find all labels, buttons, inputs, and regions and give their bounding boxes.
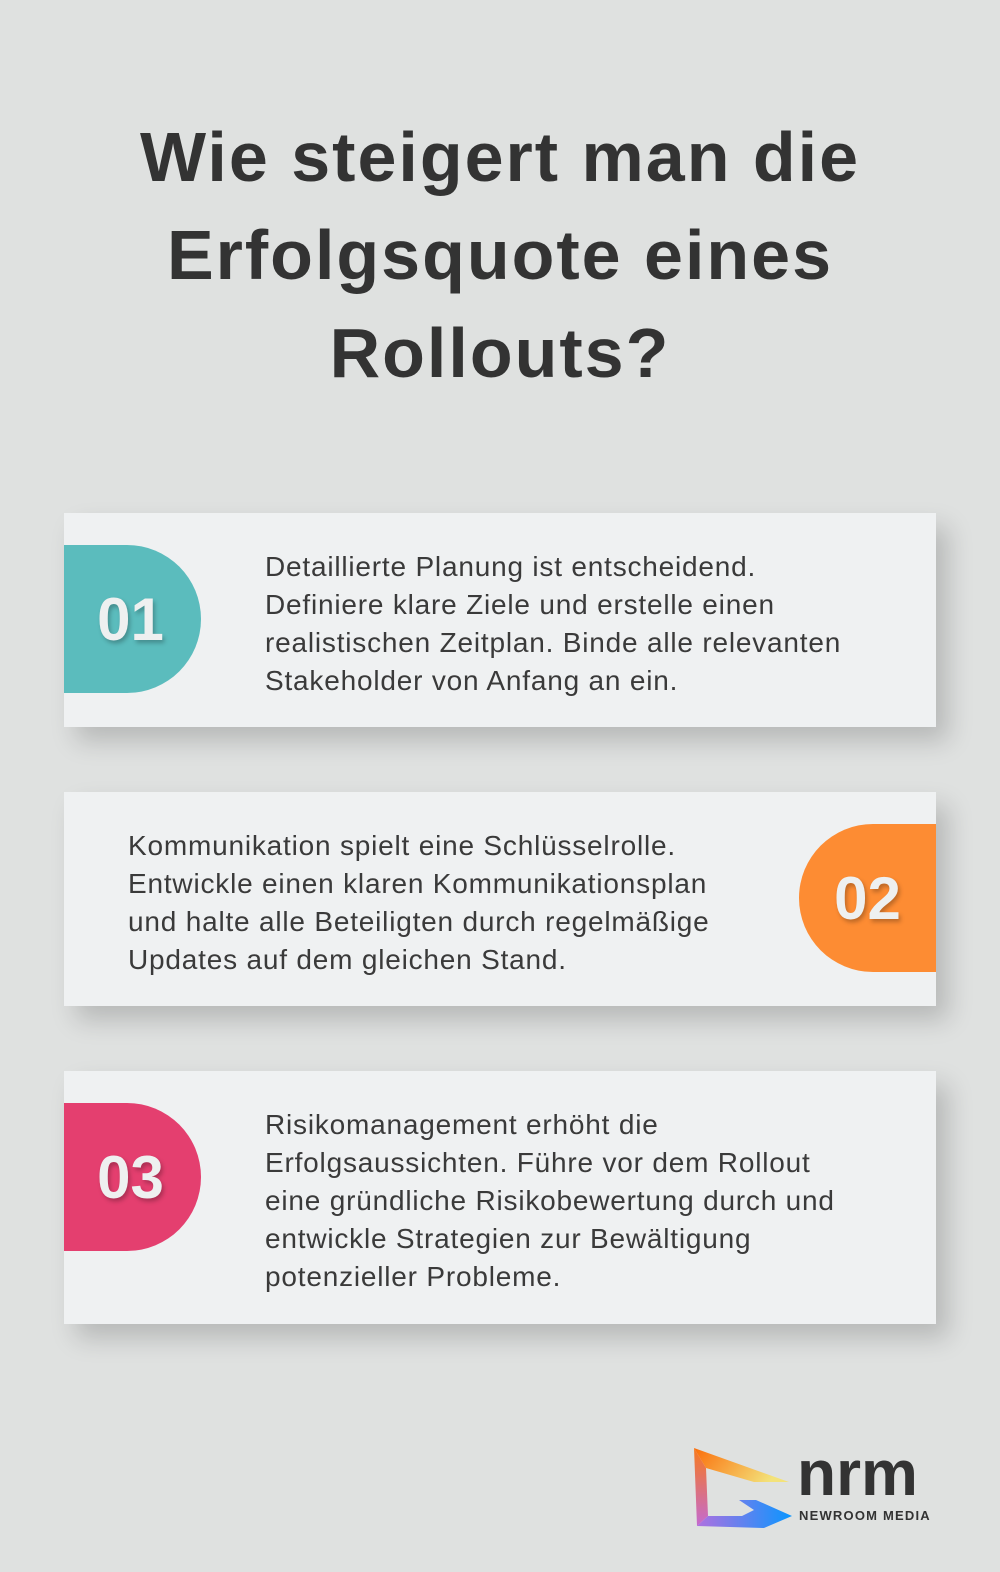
- text 2: und halte alle Beteiligten durch regelmäßige: [128, 906, 710, 937]
- text 1: Stakeholder von Anfang an ein.: [265, 665, 678, 696]
- text 1: Definiere klare Ziele und erstelle einen: [265, 589, 775, 620]
- logo: NEWROOM MEDIA: [799, 1508, 931, 1523]
- card 2: [64, 792, 936, 1006]
- text 3: potenzieller Probleme.: [265, 1261, 561, 1292]
- icon: logo mark: [694, 1448, 792, 1528]
- text 1: Detaillierte Planung ist entscheidend.: [265, 551, 756, 582]
- text 2: Updates auf dem gleichen Stand.: [128, 944, 567, 975]
- badge 03: [64, 1103, 201, 1251]
- title: Rollouts?: [330, 314, 670, 392]
- text 3: [265, 1109, 835, 1292]
- title: [140, 118, 860, 392]
- title: Wie steigert man die: [140, 118, 860, 196]
- title: Erfolgsquote eines: [167, 216, 833, 294]
- text 2: [128, 830, 710, 975]
- logo text: nrm: [797, 1437, 918, 1509]
- text 1: [265, 551, 841, 696]
- badge 03: 03: [97, 1144, 164, 1210]
- card 3: [64, 1071, 936, 1324]
- text 3: Erfolgsaussichten. Führe vor dem Rollout: [265, 1147, 811, 1178]
- badge 01: [64, 545, 201, 693]
- badge 02: [799, 824, 936, 972]
- text 3: eine gründliche Risikobewertung durch und: [265, 1185, 835, 1216]
- text 2: Kommunikation spielt eine Schlüsselrolle.: [128, 830, 676, 861]
- logo: [694, 1437, 931, 1528]
- text 3: Risikomanagement erhöht die: [265, 1109, 659, 1140]
- badge 01: 01: [97, 586, 164, 652]
- text 3: entwickle Strategien zur Bewältigung: [265, 1223, 751, 1254]
- badge 02: 02: [834, 864, 901, 932]
- card 1: [64, 513, 936, 727]
- text 1: realistischen Zeitplan. Binde alle relevanten: [265, 627, 841, 658]
- text 2: Entwickle einen klaren Kommunikationsplan: [128, 868, 707, 899]
